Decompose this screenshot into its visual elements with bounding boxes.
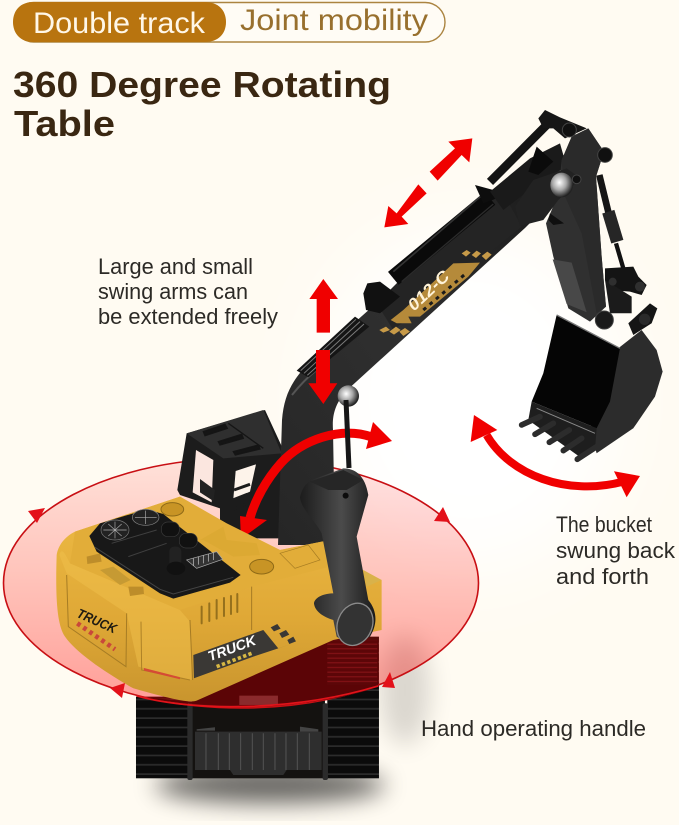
label: bucket: The bucket — [556, 512, 652, 537]
label: swing arms: Large and small — [98, 254, 253, 279]
stick arm — [490, 110, 657, 335]
bucket cylinder — [599, 175, 623, 268]
gold model badge — [379, 250, 492, 336]
stick body — [546, 128, 606, 322]
rotating red disc — [4, 458, 478, 708]
handle rod — [346, 400, 349, 468]
excavator body — [56, 497, 382, 701]
track front plates — [195, 727, 322, 775]
rear red stripe — [144, 668, 180, 679]
side vents — [202, 594, 237, 623]
rear truck label: TRUCK — [75, 606, 120, 637]
title — [13, 64, 391, 144]
label: swing arms — [98, 254, 278, 329]
underside tinted through disc — [136, 640, 378, 707]
label: bucket: and forth — [556, 564, 649, 589]
boom ribs — [297, 317, 369, 377]
bucket teeth — [522, 417, 597, 459]
arrows: small arm extension — [384, 138, 472, 227]
upper struts — [490, 125, 547, 182]
hand operating lever — [300, 468, 379, 651]
bucket links — [595, 267, 657, 335]
boom — [278, 165, 558, 545]
gold model badge: 012-C — [404, 266, 454, 315]
arrow: cab swing curved — [240, 422, 392, 539]
pin highlight — [550, 173, 573, 197]
bucket — [522, 315, 663, 459]
active tab: double track: Double track — [33, 7, 206, 40]
boom pin — [338, 385, 359, 407]
crawler tracks — [136, 637, 379, 780]
hydraulic cylinder — [363, 185, 497, 313]
side truck badge: TRUCK — [206, 632, 259, 664]
rotation direction markers — [28, 507, 450, 698]
title: 360 Degree Rotating — [13, 64, 391, 105]
excavator ground shadow — [155, 635, 430, 803]
right deck details — [280, 545, 320, 568]
label: swing arms: be extended freely — [98, 304, 278, 329]
arrow: bucket swing — [471, 415, 640, 497]
tab switcher — [13, 2, 445, 42]
link plate — [515, 168, 581, 226]
gears — [161, 503, 274, 574]
title: Table — [14, 103, 115, 144]
label: bucket: swung back — [556, 538, 676, 563]
label: handle: Hand operating handle — [421, 716, 646, 741]
label: bucket — [556, 512, 676, 589]
cab side window — [233, 464, 256, 499]
rear control box — [89, 509, 241, 599]
top pins — [538, 110, 612, 184]
cab front window — [193, 450, 213, 502]
body top deck — [70, 497, 330, 610]
inactive tab: joint mobility: Joint mobility — [240, 4, 428, 37]
label: swing arms: swing arms can — [98, 279, 248, 304]
active tab: double track — [13, 2, 226, 42]
side truck badge — [193, 624, 296, 678]
arrows: large arm up and down — [308, 279, 338, 404]
cab — [177, 410, 285, 538]
